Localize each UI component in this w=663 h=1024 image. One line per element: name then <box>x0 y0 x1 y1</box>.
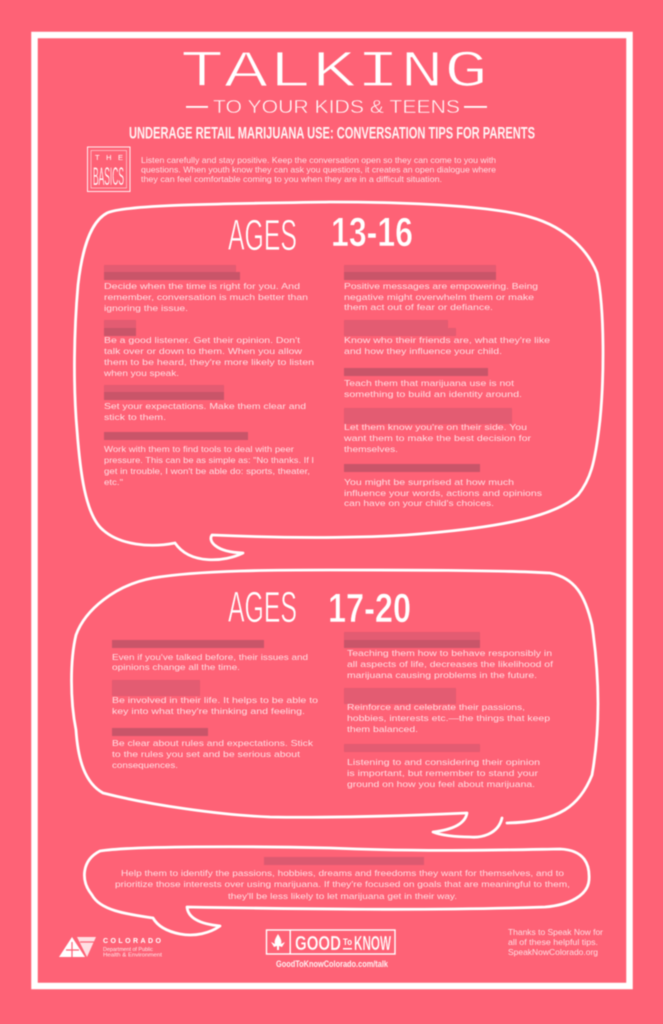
credit note: SpeakNowColorado.org <box>508 948 598 957</box>
tips right column: themselves. <box>344 445 398 454</box>
tips left column: opinions change all the time. <box>112 663 240 672</box>
tips right column: Know who their friends are, what they're like <box>344 336 551 345</box>
tips left column: consequences. <box>112 761 178 770</box>
credit note: Thanks to Speak Now for <box>508 928 603 937</box>
speech bubble outline <box>74 202 603 560</box>
tips right column <box>347 649 554 789</box>
panel: ages 13-16 <box>74 202 603 560</box>
icon: the basics badge: THE <box>95 153 123 162</box>
tips left column: key into what they're thinking and feeling. <box>112 707 305 716</box>
tips right column: Reinforce and celebrate their passions, <box>347 703 525 712</box>
logo: good to know <box>266 930 395 955</box>
title: TALKING <box>180 43 488 102</box>
intro text: Listen carefully and stay positive. Keep the conversation open so they can come to you with <box>141 156 496 165</box>
icon: triangles <box>59 937 96 957</box>
tips right column: want them to make the best decision for <box>343 434 531 443</box>
intro text: they can feel comfortable coming to you when they are in a difficult situation. <box>141 175 442 184</box>
tips left column: them to be heard, they're more likely to listen <box>104 358 315 367</box>
ages heading: AGES <box>228 583 297 632</box>
tips left column: etc." <box>104 478 123 487</box>
tips right column: marijuana causing problems in the future. <box>347 671 537 680</box>
tips right column: Let them know you're on their side. You <box>344 423 528 432</box>
credit note: all of these helpful tips. <box>508 938 598 947</box>
tips left column: Set your expectations. Make them clear and <box>104 402 307 411</box>
tips left column <box>103 282 315 487</box>
redacted subheads left <box>104 265 248 440</box>
intro text: questions. When youth know they can ask you questions, it creates an open dialogue where <box>141 166 496 174</box>
redacted subheads right <box>344 265 512 472</box>
intro text <box>141 156 496 184</box>
panel: ages 17-20 <box>72 570 598 837</box>
tips left column: when you speak. <box>103 369 179 378</box>
tips right column: something to build an identity around. <box>344 390 522 399</box>
ages heading: 17-20 <box>328 585 411 631</box>
tips left column: talk over or down to them. When you allow <box>104 347 302 356</box>
tips right column: negative might overwhelm them or make <box>344 293 535 302</box>
tips right column: them act out of fear or defiance. <box>344 303 493 312</box>
tips left column: Even if you've talked before, their issues and <box>112 653 309 662</box>
logo: colorado department of public health: Department of Public <box>103 947 154 953</box>
tips left column: to the rules you set and be serious about <box>112 750 301 759</box>
tips left column: Be clear about rules and expectations. Stick <box>112 739 314 748</box>
logo: colorado department of public health <box>59 937 163 958</box>
tips right column: influence your words, actions and opinions <box>344 489 542 498</box>
icon: leaf <box>271 934 285 950</box>
ages heading: 13-16 <box>331 209 413 255</box>
redacted subhead <box>264 857 424 865</box>
tips left column: remember, conversation is much better than <box>104 293 309 302</box>
tips right column: Teaching them how to behave responsibly in <box>347 649 553 658</box>
closing tip text: they'll be less likely to let marijuana get in their way. <box>228 892 457 901</box>
closing tip text <box>115 869 570 901</box>
tips right column: is important, but remember to stand your <box>347 769 538 778</box>
tips right column: all aspects of life, decreases the likelihood of <box>347 660 554 669</box>
text: BASICS <box>93 163 124 191</box>
tips left column: ignoring the issue. <box>104 304 188 313</box>
tips right column: Positive messages are empowering. Being <box>344 282 539 291</box>
website url: GoodToKnowColorado.com/talk <box>276 959 389 970</box>
logo: colorado department of public health: COLORADO <box>103 938 162 945</box>
tips left column: pressure. This can be as simple as: "No thanks. If I <box>104 456 314 465</box>
logo: good to know: GOOD <box>295 933 341 955</box>
redacted subheads left <box>112 640 264 736</box>
tips right column: You might be surprised at how much <box>344 478 515 487</box>
tips right column: can have on your child's choices. <box>344 499 494 508</box>
credit note <box>508 928 603 957</box>
tips right column: hobbies, interests etc.—the things that keep <box>347 714 551 723</box>
speech bubble outline <box>84 847 589 935</box>
logo: good to know: To <box>343 937 352 947</box>
closing tip text: Help them to identify the passions, hobbies, dreams and freedoms they want for themselves, and to <box>121 869 565 878</box>
tips left column: get in trouble, I won't be able do: sports, theater, <box>104 467 310 476</box>
logo: colorado department of public health: Health & Environment <box>103 952 163 958</box>
tips right column: ground on how you feel about marijuana. <box>347 780 535 789</box>
tips right column: Teach them that marijuana use is not <box>344 379 515 388</box>
tips left column <box>112 653 319 770</box>
logo: good to know: KNOW <box>354 933 391 955</box>
ages heading <box>228 583 411 632</box>
tips left column: Be a good listener. Get their opinion. Don't <box>104 336 301 345</box>
tips left column: Be involved in their life. It helps to be able to <box>112 696 319 705</box>
closing tip text: prioritize those interests over using marijuana. If they're focused on goals that are meaningful to them, <box>115 880 570 889</box>
tips left column: stick to them. <box>104 413 166 422</box>
ages heading: AGES <box>228 211 297 260</box>
tips left column: Decide when the time is right for you. And <box>104 282 301 291</box>
redacted subheads right <box>344 632 480 752</box>
icon: the basics badge <box>88 147 130 192</box>
subtitle: TO YOUR KIDS & TEENS <box>213 97 460 117</box>
tips right column <box>343 282 551 508</box>
ages heading <box>228 209 413 260</box>
tips right column: them balanced. <box>347 725 418 734</box>
speech bubble outline <box>72 570 598 837</box>
tips left column: Work with them to find tools to deal with peer <box>104 445 294 454</box>
tips right column: Listening to and considering their opinion <box>347 758 541 767</box>
panel: closing tip <box>84 847 589 935</box>
tips right column: and how they influence your child. <box>344 347 502 356</box>
